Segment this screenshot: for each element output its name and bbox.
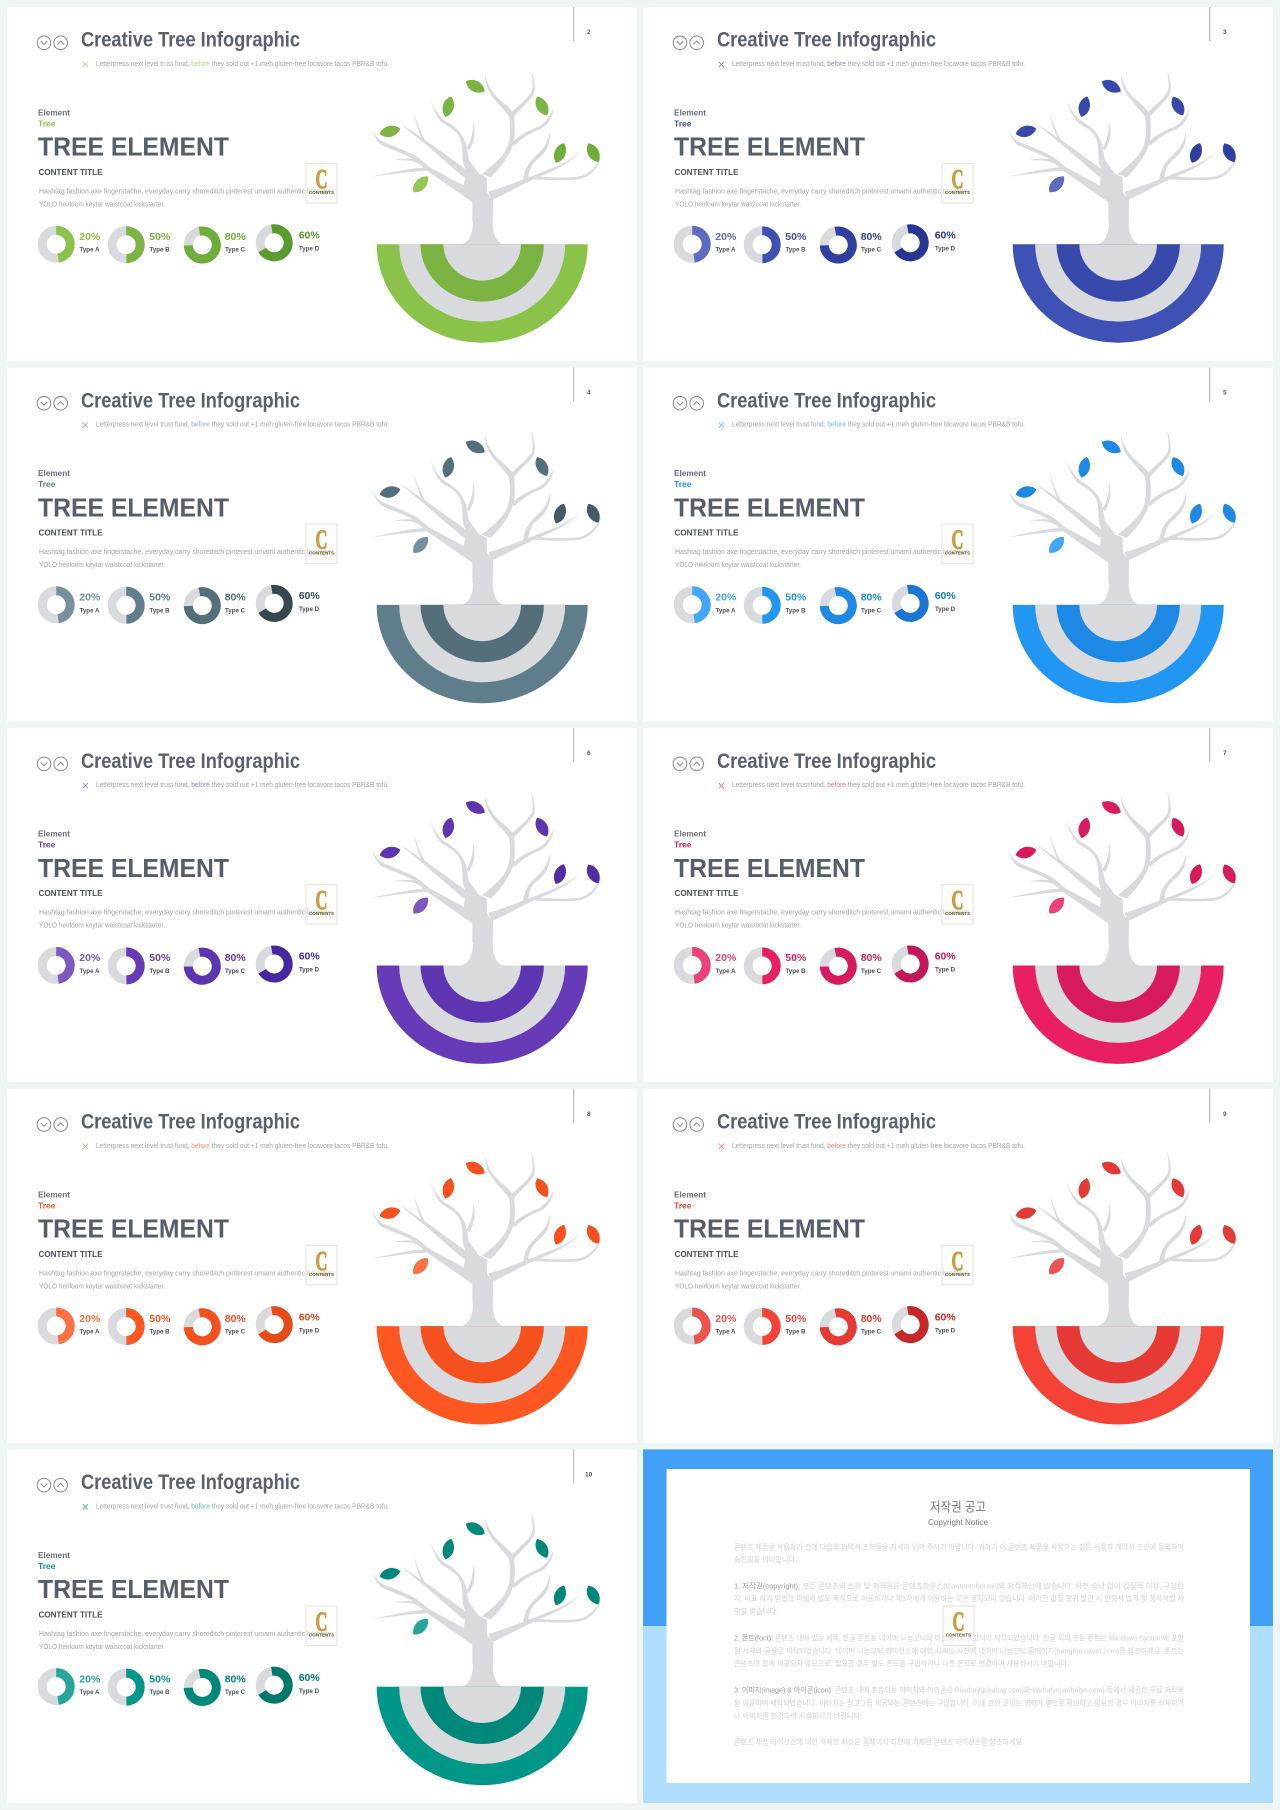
donut charts: 60% <box>299 230 320 242</box>
donut charts: 60% <box>299 951 320 963</box>
logo stamp <box>942 524 973 564</box>
page number: 2 <box>587 29 591 36</box>
donut charts: Type D <box>935 1327 956 1334</box>
donut charts: 80% <box>225 1313 246 1325</box>
notice section: image and icon <box>734 1686 1184 1720</box>
page number: 10 <box>585 1471 593 1478</box>
donut charts: Type D <box>299 967 320 974</box>
body text: Hashtag fashion axe fingerstache, everyday carry shoreditch pinterest umami authentic brooklyn <box>39 1629 333 1638</box>
icon: x mark <box>83 1504 88 1510</box>
donut charts: 20% <box>79 952 101 964</box>
panel: slate tree slide <box>7 368 637 722</box>
notice section: image and icon: 을 이용하여 제작되었습니다. 이미지는 참고그림 제공되는 콘텐츠에는 구입합니다. 이에 관한 권리는 귀하가 별도로 확인하고 필요한 경우 이미지를 삭제하거 <box>734 1698 1184 1708</box>
icon: x mark <box>83 783 88 788</box>
donut charts <box>42 948 320 983</box>
donut charts: Type A <box>716 607 736 614</box>
page number: 5 <box>1223 390 1227 397</box>
icon: navigation arrows <box>673 36 704 50</box>
label: element: Element <box>38 1189 70 1199</box>
title: Creative Tree Infographic <box>717 389 936 412</box>
notice intro: 콘텐츠 제품을 사용하기 전에 다음의 협약서 조항들을 자세히 읽어 주시기 바랍니다. 귀하가 이 콘텐츠 제품을 사용하는 것은 사용자 계약서 조건에 동의하여 <box>734 1542 1184 1552</box>
donut charts: Type C <box>225 1329 246 1336</box>
logo stamp: CONTENTS <box>309 1632 334 1637</box>
label: tree: Tree <box>674 479 692 489</box>
notice subtitle: Copyright Notice <box>928 1517 988 1527</box>
donut charts: Type D <box>935 606 956 613</box>
icon: navigation arrows <box>673 396 704 410</box>
panel: sky blue tree slide <box>643 368 1273 722</box>
subtitle: Letterpress next level trust fund, before they sold out +1 meh gluten-free locavore tacos PBR&B tofu. <box>96 1141 389 1150</box>
content title: CONTENT TITLE <box>38 168 103 177</box>
logo stamp: C <box>952 885 964 915</box>
heading: TREE ELEMENT <box>38 855 229 883</box>
page number: 8 <box>587 1111 591 1118</box>
page number: 7 <box>1223 750 1227 757</box>
donut charts <box>42 1308 320 1343</box>
body text: YOLO heirloom keytar waistcoat kickstarter. <box>39 1642 165 1651</box>
donut charts <box>678 587 956 622</box>
logo stamp <box>306 524 337 564</box>
logo stamp: C <box>316 1246 328 1276</box>
panel: pink tree slide <box>643 728 1273 1082</box>
body text: Hashtag fashion axe fingerstache, everyday carry shoreditch pinterest umami authentic brooklyn <box>675 186 969 196</box>
donut charts <box>678 1308 956 1343</box>
content title: CONTENT TITLE <box>38 889 103 898</box>
donut charts: 20% <box>79 231 101 243</box>
body text: Hashtag fashion axe fingerstache, everyday carry shoreditch pinterest umami authentic brooklyn <box>675 547 969 556</box>
logo stamp: C <box>952 1246 964 1276</box>
body text: Hashtag fashion axe fingerstache, everyday carry shoreditch pinterest umami authentic brooklyn <box>39 1268 333 1277</box>
donut charts: 80% <box>225 1673 246 1685</box>
page number <box>1209 1089 1227 1123</box>
body text: YOLO heirloom keytar waistcoat kickstarter. <box>39 1281 165 1290</box>
icon: x mark <box>719 62 724 67</box>
donut charts: 60% <box>935 951 956 963</box>
content title: CONTENT TITLE <box>38 529 103 538</box>
notice section: copyright: 항을 받습니다. <box>734 1607 778 1616</box>
label: tree: Tree <box>38 840 56 850</box>
label: tree: Tree <box>38 1561 56 1571</box>
heading: TREE ELEMENT <box>674 1216 865 1244</box>
donut charts: Type A <box>80 247 100 254</box>
donut charts: Type A <box>716 1329 736 1336</box>
notice section: font: 된 서체와 글꼴로 제작되었습니다. 네이버 나눔고딕 라이선스에 대한 사례는 사전에 네이버 나눔고딕 홈페이지(hangeul.naver.com)를 참조하세요. 폰트는 <box>734 1646 1184 1656</box>
content title: CONTENT TITLE <box>674 168 739 177</box>
donut charts: 80% <box>861 231 882 243</box>
notice section: image and icon: 3. 이미지(image) & 아이콘(icon): 콘텐츠 내에 포함되는 이미지와 아이콘은 Pixabay(pixabay.com)와 Webalys(webalys.com) 등에서 제공한 무료 저작물 <box>734 1686 1184 1694</box>
logo stamp: CONTENTS <box>309 551 334 556</box>
icon: navigation arrows <box>37 396 68 410</box>
logo stamp: C <box>316 525 328 555</box>
logo stamp: C <box>952 164 964 194</box>
body text: YOLO heirloom keytar waistcoat kickstarter. <box>675 560 801 569</box>
donut charts <box>678 948 956 983</box>
title: Creative Tree Infographic <box>717 750 936 773</box>
heading: TREE ELEMENT <box>38 1576 229 1604</box>
icon: x mark <box>83 1144 88 1149</box>
donut charts: 80% <box>861 952 882 964</box>
donut charts: 60% <box>935 230 956 242</box>
icon: x mark <box>719 1144 724 1149</box>
logo stamp: CONTENTS <box>945 1272 970 1277</box>
donut charts: Type C <box>861 1329 882 1336</box>
donut charts: 60% <box>299 590 320 602</box>
donut charts: Type B <box>786 1329 806 1336</box>
body text: Hashtag fashion axe fingerstache, everyday carry shoreditch pinterest umami authentic brooklyn <box>39 547 333 556</box>
donut charts: Type C <box>225 247 246 254</box>
body text: YOLO heirloom keytar waistcoat kickstarter. <box>675 1281 801 1290</box>
notice section: image and icon: 나 이미지를 변경하여 사용하시기 바랍니다. <box>734 1712 862 1720</box>
title: Creative Tree Infographic <box>81 1471 300 1494</box>
title: Creative Tree Infographic <box>81 29 300 52</box>
donut charts: Type D <box>299 246 320 252</box>
illustration: tree with roots rings <box>371 431 603 703</box>
content title: CONTENT TITLE <box>38 1250 103 1259</box>
body text <box>675 908 969 930</box>
page number <box>573 1449 593 1483</box>
body text <box>39 1629 333 1651</box>
page number: 3 <box>1223 29 1227 36</box>
donut charts: Type B <box>150 968 170 975</box>
page number <box>573 728 591 762</box>
icon: x mark <box>719 422 724 428</box>
donut charts: 20% <box>79 1673 101 1685</box>
icon: x mark <box>719 783 724 788</box>
content title: CONTENT TITLE <box>674 1250 739 1259</box>
donut charts: 20% <box>79 1313 101 1325</box>
subtitle: Letterpress next level trust fund, before they sold out +1 meh gluten-free locavore tacos PBR&B tofu. <box>732 59 1025 68</box>
donut charts: 60% <box>299 1311 320 1323</box>
panel: green tree slide <box>7 7 637 361</box>
logo stamp: CONTENTS <box>309 1272 334 1277</box>
page number <box>573 7 591 41</box>
illustration: tree with roots rings <box>371 1512 603 1785</box>
body text: YOLO heirloom keytar waistcoat kickstarter. <box>675 200 801 208</box>
page number <box>573 1089 591 1123</box>
label: element: Element <box>674 108 706 118</box>
icon: navigation arrows <box>673 757 704 771</box>
body text: YOLO heirloom keytar waistcoat kickstarter. <box>39 560 165 569</box>
logo stamp: C <box>952 1606 964 1636</box>
logo stamp: C <box>316 164 328 194</box>
title: Creative Tree Infographic <box>717 29 936 52</box>
panel: teal tree slide <box>7 1449 637 1803</box>
logo stamp <box>306 885 337 924</box>
logo stamp <box>306 1245 337 1285</box>
donut charts: 60% <box>935 1311 956 1323</box>
label: element: Element <box>38 468 70 478</box>
donut charts: Type A <box>80 1689 100 1696</box>
heading: TREE ELEMENT <box>38 494 229 522</box>
donut charts: 80% <box>861 592 882 604</box>
notice section: copyright <box>734 1582 1184 1616</box>
page number <box>573 368 591 402</box>
label: element: Element <box>38 1550 70 1560</box>
panel: orange tree slide <box>7 1089 637 1443</box>
subtitle: Letterpress next level trust fund, before they sold out +1 meh gluten-free locavore tacos PBR&B tofu. <box>732 780 1025 789</box>
title: Creative Tree Infographic <box>81 1111 300 1134</box>
notice title: 저작권 공고 <box>930 1500 986 1515</box>
illustration: tree with roots rings <box>371 1152 603 1424</box>
donut charts: 20% <box>715 952 737 964</box>
logo stamp <box>306 164 337 203</box>
donut charts: Type B <box>150 1329 170 1336</box>
body text: Hashtag fashion axe fingerstache, everyday carry shoreditch pinterest umami authentic brooklyn <box>675 908 969 917</box>
logo stamp: CONTENTS <box>946 1632 971 1638</box>
heading: TREE ELEMENT <box>38 1216 229 1244</box>
body text: YOLO heirloom keytar waistcoat kickstarter. <box>39 921 165 930</box>
illustration: tree with roots rings <box>371 70 603 343</box>
donut charts: 50% <box>785 231 807 243</box>
page number <box>1209 368 1227 402</box>
donut charts: Type D <box>935 967 956 974</box>
donut charts: Type C <box>861 968 882 975</box>
label: element: Element <box>38 108 70 118</box>
donut charts: 80% <box>861 1313 882 1325</box>
donut charts: 20% <box>715 592 737 604</box>
donut charts: Type C <box>861 607 882 614</box>
notice section: font <box>734 1634 1184 1668</box>
illustration: tree with roots rings <box>1007 431 1239 703</box>
donut charts: Type A <box>716 247 736 254</box>
logo stamp: CONTENTS <box>945 911 970 916</box>
label: tree: Tree <box>674 840 692 850</box>
title: Creative Tree Infographic <box>81 389 300 412</box>
body text <box>39 186 333 208</box>
logo stamp: CONTENTS <box>309 911 334 916</box>
body text: Hashtag fashion axe fingerstache, everyday carry shoreditch pinterest umami authentic brooklyn <box>39 908 333 917</box>
logo stamp: C <box>316 885 328 915</box>
donut charts: 50% <box>785 1313 807 1325</box>
donut charts: 50% <box>149 592 171 604</box>
heading: TREE ELEMENT <box>674 494 865 522</box>
donut charts: 50% <box>785 952 807 964</box>
label: element: Element <box>674 1189 706 1199</box>
notice closing line: 콘텐츠 제품 라이선스에 대한 자세한 사항은 홈페이지 하단에 기재된 콘텐츠 라이선스를 참조하세요. <box>734 1738 1024 1746</box>
subtitle: Letterpress next level trust fund, before they sold out +1 meh gluten-free locavore tacos PBR&B tofu. <box>96 1501 389 1510</box>
donut charts: Type C <box>861 247 882 254</box>
label: element: Element <box>674 468 706 478</box>
donut charts: Type B <box>150 1689 170 1696</box>
label: tree: Tree <box>38 479 56 489</box>
donut charts: Type B <box>786 607 806 614</box>
donut charts: 50% <box>149 1313 171 1325</box>
donut charts: Type B <box>786 968 806 975</box>
icon: navigation arrows <box>673 1118 704 1131</box>
notice section: copyright: 자, 비표 사기 방법의 파생이 별도 목적으로 이용하거나 제3자에게 이용하는 것은 금지되어 있습니다. 이러한 값질 행위 발견 시 민형사 법적 및 형사처벌 사 <box>734 1594 1184 1603</box>
donut charts <box>42 587 320 622</box>
donut charts <box>42 1669 320 1704</box>
donut charts <box>42 227 320 262</box>
donut charts: 60% <box>935 590 956 602</box>
subtitle: Letterpress next level trust fund, before they sold out +1 meh gluten-free locavore tacos PBR&B tofu. <box>96 420 389 429</box>
body text: YOLO heirloom keytar waistcoat kickstarter. <box>39 200 165 208</box>
page number <box>1209 728 1227 762</box>
icon: navigation arrows <box>37 36 68 50</box>
donut charts: Type D <box>935 246 956 252</box>
donut charts: Type A <box>716 968 736 975</box>
label: tree: Tree <box>674 118 692 128</box>
label: element: Element <box>674 829 706 839</box>
panel: copyright notice <box>643 1449 1273 1803</box>
notice intro <box>734 1542 1184 1564</box>
icon: x mark <box>83 62 88 67</box>
donut charts: 20% <box>715 1313 737 1325</box>
panel: blue tree slide <box>643 7 1273 361</box>
logo stamp <box>943 1606 974 1646</box>
donut charts: 50% <box>149 1673 171 1685</box>
subtitle: Letterpress next level trust fund, before they sold out +1 meh gluten-free locavore tacos PBR&B tofu. <box>96 780 389 789</box>
heading: TREE ELEMENT <box>674 855 865 883</box>
donut charts: Type D <box>299 1327 320 1334</box>
label: tree: Tree <box>674 1200 692 1210</box>
logo stamp <box>942 1245 973 1285</box>
donut charts: Type D <box>299 606 320 613</box>
content title: CONTENT TITLE <box>38 1610 103 1619</box>
body text: YOLO heirloom keytar waistcoat kickstarter. <box>675 921 801 930</box>
donut charts: 80% <box>225 952 246 964</box>
body text <box>39 1268 333 1290</box>
donut charts: Type C <box>225 1689 246 1696</box>
donut charts: 80% <box>225 231 246 243</box>
donut charts: 50% <box>149 952 171 964</box>
donut charts: Type C <box>225 607 246 614</box>
notice section: font: 2. 폰트(font): 콘텐츠 내에 있는 제목, 한글 폰트는 네이버 나눔고딕의 비트맵, 맑은 고딕이 제작되었습니다. 한글 외의 모든 폰트는 Windows System에 포함 <box>734 1634 1184 1642</box>
donut charts: Type A <box>80 968 100 975</box>
logo stamp: CONTENTS <box>945 190 970 195</box>
title: Creative Tree Infographic <box>81 750 300 773</box>
heading: TREE ELEMENT <box>38 134 229 162</box>
subtitle: Letterpress next level trust fund, before they sold out +1 meh gluten-free locavore tacos PBR&B tofu. <box>732 1141 1025 1150</box>
donut charts: 20% <box>79 592 101 604</box>
illustration: tree with roots rings <box>1007 1152 1239 1424</box>
body text <box>675 1268 969 1290</box>
notice section: copyright: 1. 저작권(copyright): 모든 콘텐츠의 소유 및 저작권은 콘텐츠하우스(Contentshouse)의 저작재산에 있습니다. 사전 승낙 없이 값질적 이용, 구입한 <box>734 1582 1184 1590</box>
logo stamp <box>306 1606 337 1645</box>
label: tree: Tree <box>38 118 56 128</box>
notice intro: 승인함을 의미합니다. <box>734 1555 797 1564</box>
page number <box>1209 7 1227 41</box>
logo stamp <box>942 164 973 203</box>
heading: TREE ELEMENT <box>674 134 865 162</box>
body text <box>39 908 333 930</box>
body text <box>675 547 969 569</box>
notice section: font: 콘텐츠의 합에 제공되지 않으므로, 필요한 경우 별도 폰트를 구입하거나 다른 폰트로 변경하여 사용하시기 바랍니다. <box>734 1659 1069 1668</box>
logo stamp: CONTENTS <box>309 190 334 195</box>
content title: CONTENT TITLE <box>674 889 739 898</box>
content title: CONTENT TITLE <box>674 529 739 538</box>
illustration: tree with roots rings <box>1007 791 1239 1064</box>
logo stamp: C <box>316 1606 328 1636</box>
donut charts: Type A <box>80 1329 100 1336</box>
donut charts: Type B <box>150 607 170 614</box>
donut charts: 50% <box>785 592 807 604</box>
icon: x mark <box>83 422 88 428</box>
body text: Hashtag fashion axe fingerstache, everyday carry shoreditch pinterest umami authentic brooklyn <box>675 1268 969 1277</box>
body text <box>675 186 969 208</box>
panel: red tree slide <box>643 1089 1273 1443</box>
illustration: tree with roots rings <box>1007 70 1239 343</box>
donut charts: 60% <box>299 1672 320 1684</box>
subtitle: Letterpress next level trust fund, before they sold out +1 meh gluten-free locavore tacos PBR&B tofu. <box>732 420 1025 429</box>
body text: Hashtag fashion axe fingerstache, everyday carry shoreditch pinterest umami authentic brooklyn <box>39 186 333 196</box>
page number: 6 <box>587 750 591 757</box>
panel: purple tree slide <box>7 728 637 1082</box>
page number: 9 <box>1223 1111 1227 1118</box>
donut charts: Type C <box>225 968 246 975</box>
logo stamp: CONTENTS <box>945 551 970 556</box>
icon: navigation arrows <box>37 1118 68 1131</box>
icon: navigation arrows <box>37 1478 68 1492</box>
page number: 4 <box>587 390 591 397</box>
donut charts: 50% <box>149 231 171 243</box>
logo stamp <box>942 885 973 924</box>
subtitle: Letterpress next level trust fund, before they sold out +1 meh gluten-free locavore tacos PBR&B tofu. <box>96 59 389 68</box>
logo stamp: C <box>952 525 964 555</box>
donut charts: Type B <box>786 247 806 254</box>
title: Creative Tree Infographic <box>717 1111 936 1134</box>
illustration: tree with roots rings <box>371 791 603 1064</box>
body text <box>39 547 333 569</box>
donut charts: Type D <box>299 1688 320 1695</box>
icon: navigation arrows <box>37 757 68 771</box>
donut charts: 20% <box>715 231 737 243</box>
label: element: Element <box>38 829 70 839</box>
donut charts: Type B <box>150 247 170 254</box>
donut charts <box>678 227 956 262</box>
donut charts: Type A <box>80 607 100 614</box>
donut charts: 80% <box>225 592 246 604</box>
label: tree: Tree <box>38 1200 56 1210</box>
